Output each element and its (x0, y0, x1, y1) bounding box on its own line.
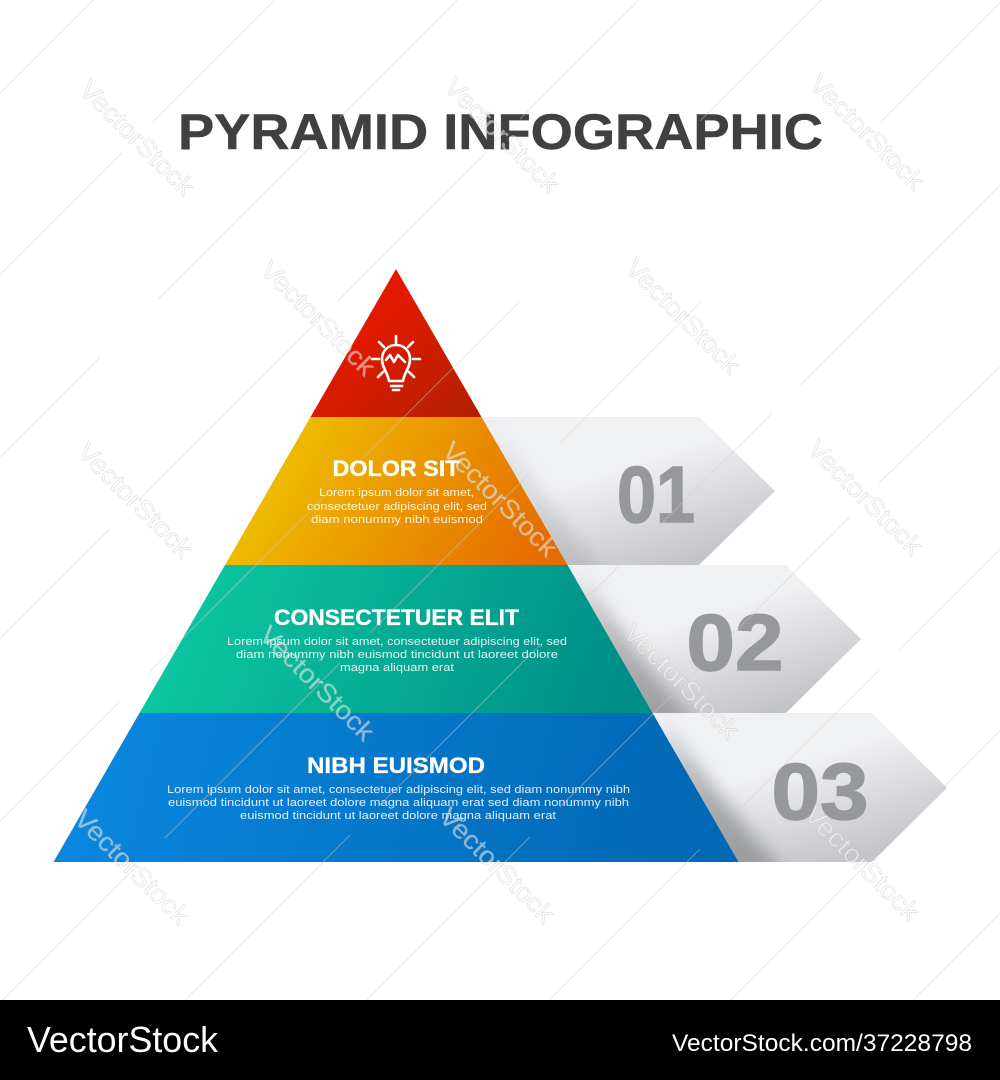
watermark: VectorStock (254, 254, 382, 382)
number 02: 02 (686, 598, 784, 687)
arrow panel 02 (567, 565, 861, 728)
text block: dolor sit: Lorem ipsum dolor sit amet, (319, 487, 474, 499)
text block: consectetuer elit: CONSECTETUER ELIT (274, 605, 520, 630)
text block: dolor sit: DOLOR SIT (332, 456, 460, 481)
text block: nibh euismod (167, 753, 630, 822)
pyramid tier: blue (54, 713, 738, 862)
arrow panel 03 (652, 713, 947, 877)
pyramid tier: orange (225, 417, 568, 565)
footer bar (0, 1000, 1000, 1080)
watermark: VectorStock (438, 71, 566, 199)
text block: nibh euismod: euismod tincidunt ut laoreet dolore magna aliquam erat (240, 810, 556, 822)
watermark: VectorStock (73, 74, 201, 202)
watermark: VectorStock (798, 799, 926, 927)
watermark: VectorStock (801, 433, 929, 561)
text block: consectetuer elit: Lorem ipsum dolor sit amet, consectetuer adipiscing elit, sed (227, 636, 567, 648)
number 03: 03 (772, 747, 868, 836)
text block: nibh euismod: euismod tincidunt ut laoreet dolore magna aliquam erat sed diam nonummy nibh (168, 797, 629, 809)
text block: nibh euismod: NIBH EUISMOD (307, 753, 485, 778)
text block: dolor sit: consectetuer adipiscing elit, sed (307, 501, 487, 513)
arrow panel 01 (481, 417, 775, 580)
watermark: VectorStock (803, 68, 931, 196)
text block: dolor sit (307, 456, 487, 526)
text block: consectetuer elit (227, 605, 567, 674)
title: PYRAMID INFOGRAPHIC (178, 104, 823, 160)
watermark: VectorStock (436, 435, 564, 563)
watermark: VectorStock (253, 619, 381, 747)
text block: nibh euismod: Lorem ipsum dolor sit amet, consectetuer adipiscing elit, sed diam nonummy nibh (167, 784, 630, 796)
watermark: VectorStock (68, 803, 196, 931)
footer brand: VectorStock (27, 1019, 219, 1060)
pyramid tier: red top (310, 269, 482, 417)
text block: consectetuer elit: magna aliquam erat (340, 662, 454, 674)
watermark: VectorStock (619, 252, 747, 380)
text block: dolor sit: diam nonummy nibh euismod (311, 514, 483, 526)
footer image id: VectorStock.com/37228798 (672, 1030, 972, 1057)
text block: consectetuer elit: diam nonummy nibh euismod tincidunt ut laoreet dolore (236, 649, 558, 661)
watermark: VectorStock (617, 617, 745, 745)
watermark: VectorStock (71, 436, 199, 564)
watermark (68, 68, 931, 931)
pyramid (54, 269, 738, 862)
icon: light bulb (372, 336, 420, 390)
number 01: 01 (617, 450, 695, 539)
pyramid tier: green (140, 565, 652, 713)
watermark: VectorStock (433, 801, 561, 929)
